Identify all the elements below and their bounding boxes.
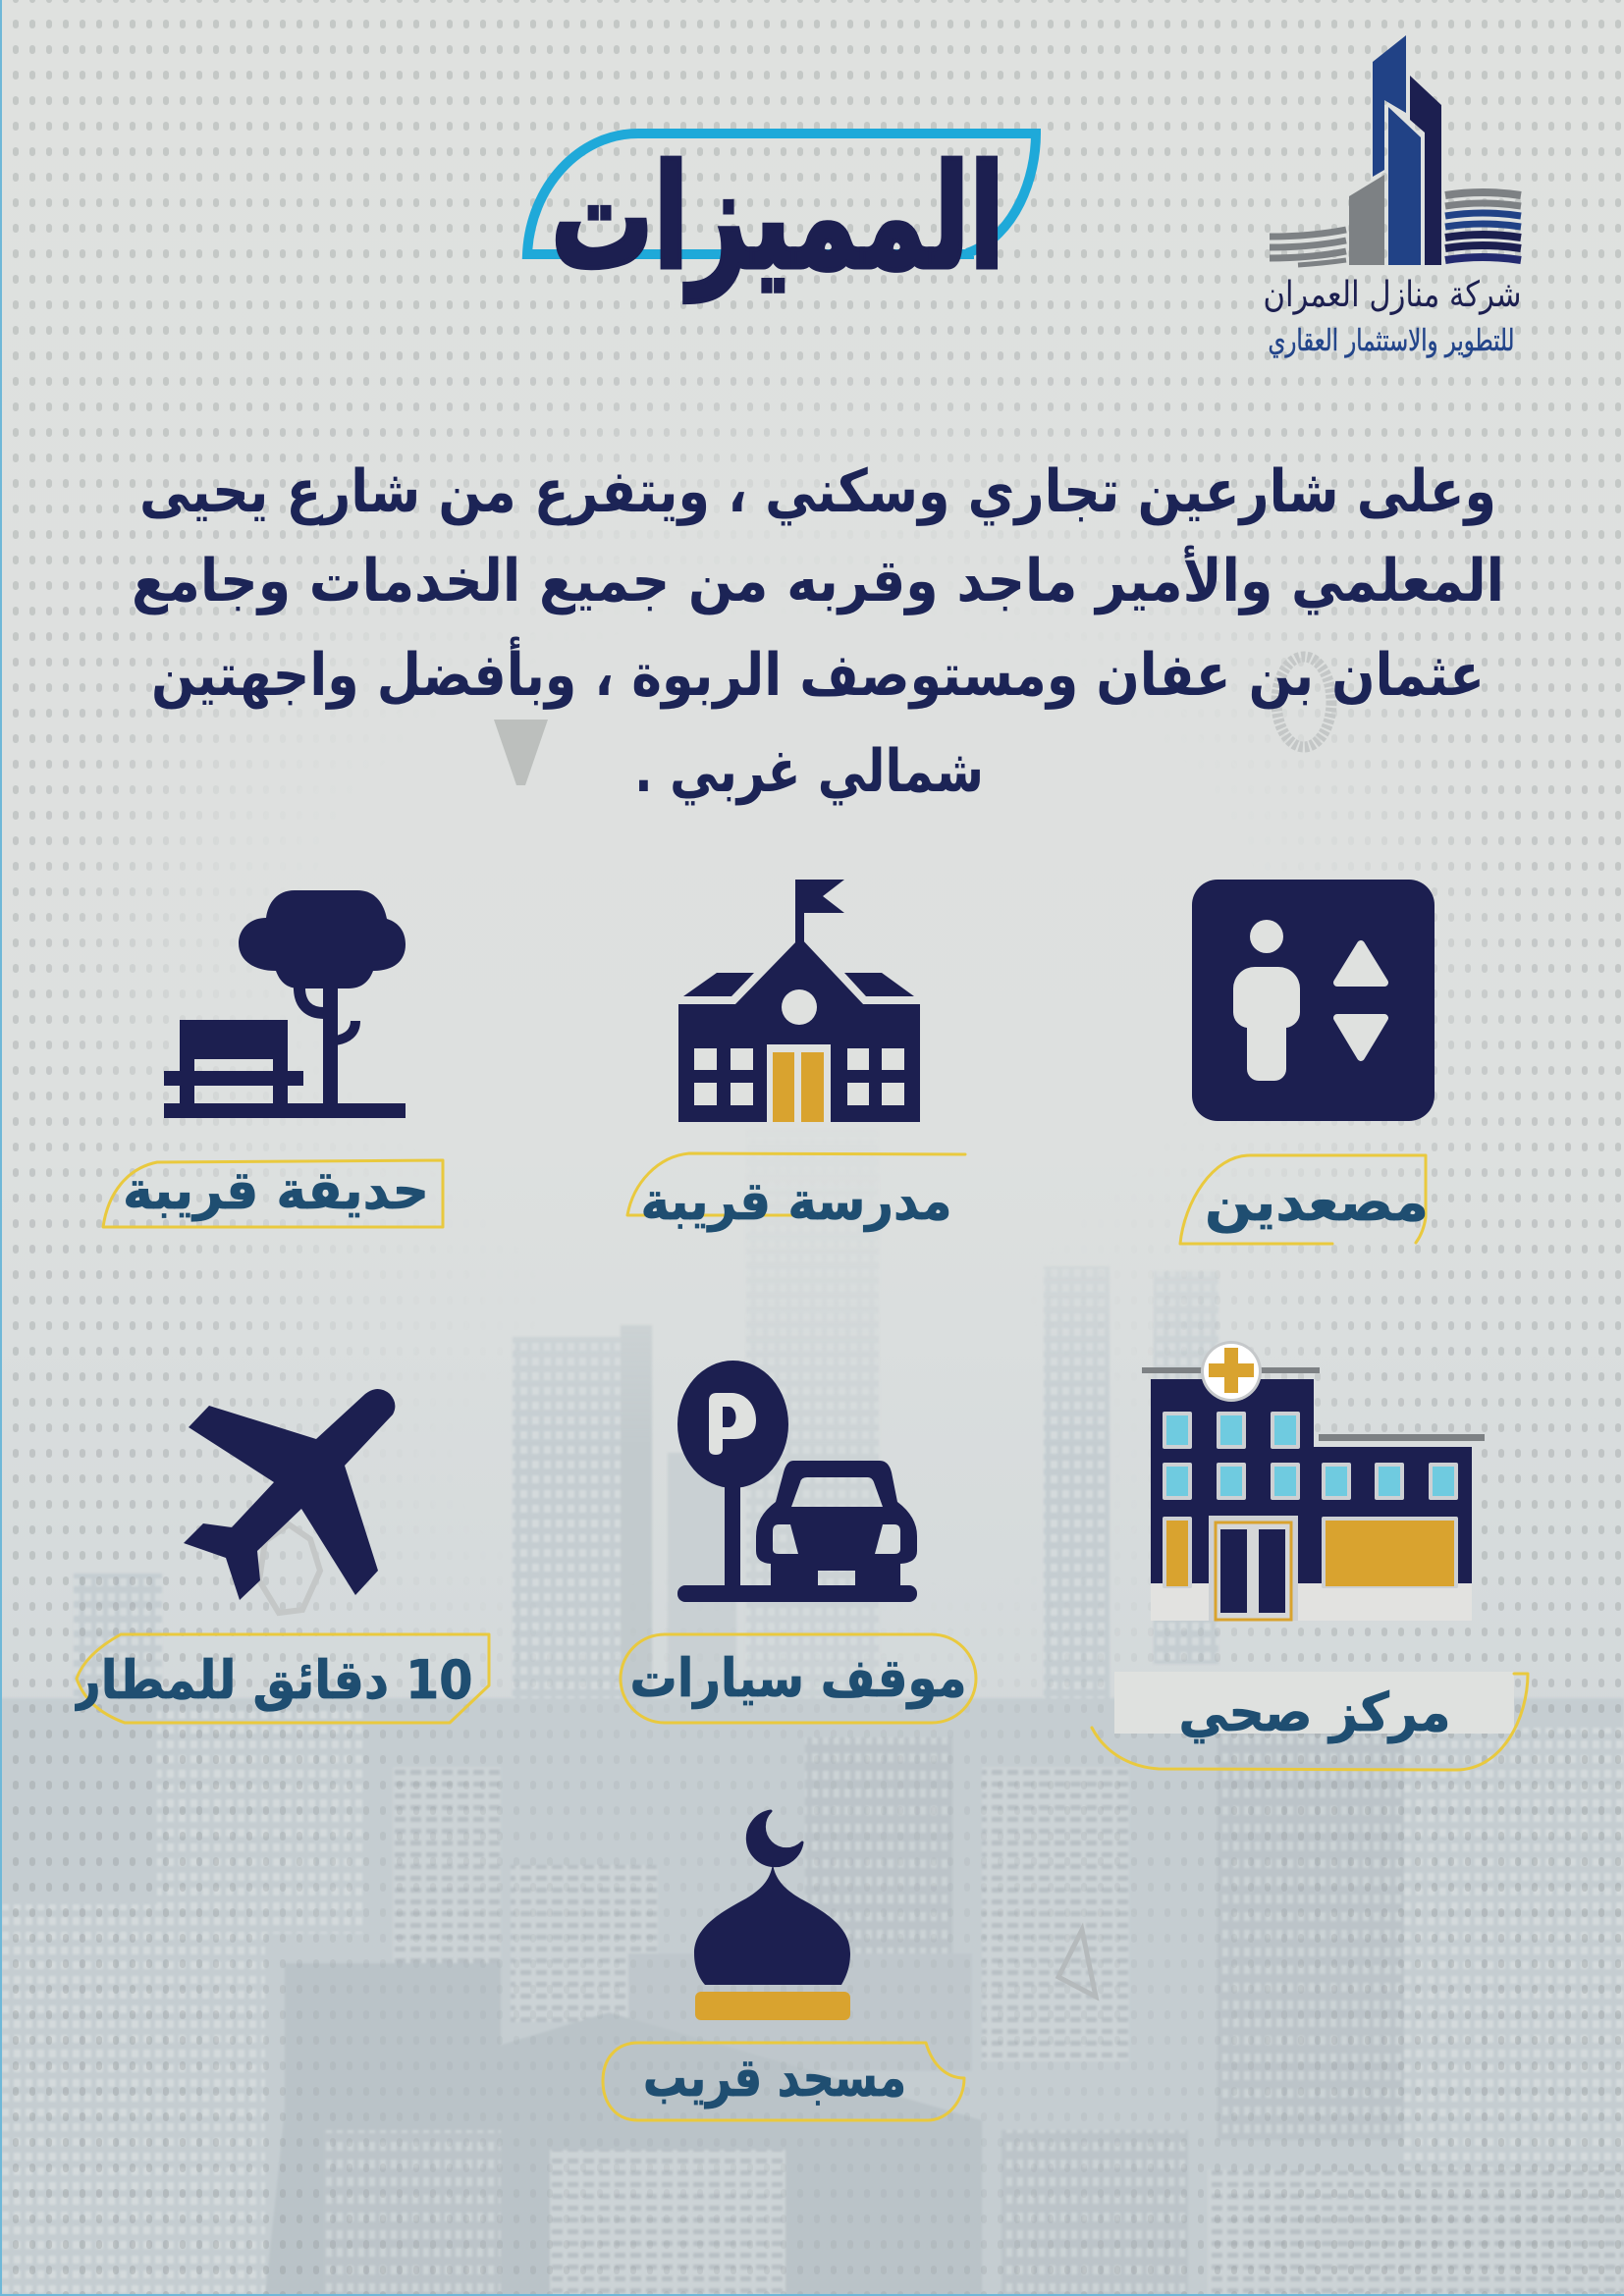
label: health center (1092, 1672, 1528, 1770)
label: nearby park: حديقة قريبة (123, 1159, 429, 1221)
panel: health center (1092, 1341, 1528, 1770)
title (527, 133, 1036, 302)
logo tagline: للتطوير والاستثمار العقاري (1269, 324, 1514, 358)
icon: parking and car (677, 1361, 917, 1602)
icon: mosque dome (694, 1811, 850, 2020)
label: ten minutes to airport: 10 دقائق للمطار (71, 1649, 473, 1711)
title text: المميزات (551, 134, 1004, 302)
intro paragraph (132, 457, 1504, 806)
label: nearby mosque: مسجد قريب (643, 2047, 906, 2109)
panel: elevators (1180, 880, 1435, 1244)
icon: hospital (1142, 1341, 1485, 1621)
label: car parking (621, 1634, 976, 1723)
label: health center: مركز صحي (1178, 1682, 1451, 1743)
icon: airplane (184, 1389, 395, 1600)
panel: nearby school (627, 880, 965, 1232)
logo name: شركة منازل العمران (1263, 275, 1522, 315)
logo icon: towers (1270, 35, 1521, 265)
panel: nearby park (103, 890, 443, 1227)
panel: ten minutes to airport (71, 1389, 489, 1723)
intro paragraph: شمالي غربي . (634, 737, 984, 806)
label: ten minutes to airport (71, 1634, 489, 1723)
icon: park tree and bench (164, 890, 406, 1118)
decorative ghost shapes (259, 657, 1331, 1997)
intro paragraph: المعلمي والأمير ماجد وقربه من جميع الخدمات وجامع (132, 545, 1504, 615)
panel: nearby mosque (603, 1811, 964, 2120)
label: elevators (1180, 1155, 1429, 1244)
panel: car parking (621, 1361, 976, 1723)
label: car parking: موقف سيارات (630, 1647, 966, 1709)
logo: Manazel Al-Omran (1263, 35, 1522, 358)
label: elevators: مصعدين (1205, 1171, 1429, 1233)
icon: school (678, 880, 920, 1122)
icon: elevator (1192, 880, 1435, 1121)
label: nearby school: مدرسة قريبة (640, 1170, 952, 1232)
title outline shape (527, 133, 1036, 254)
